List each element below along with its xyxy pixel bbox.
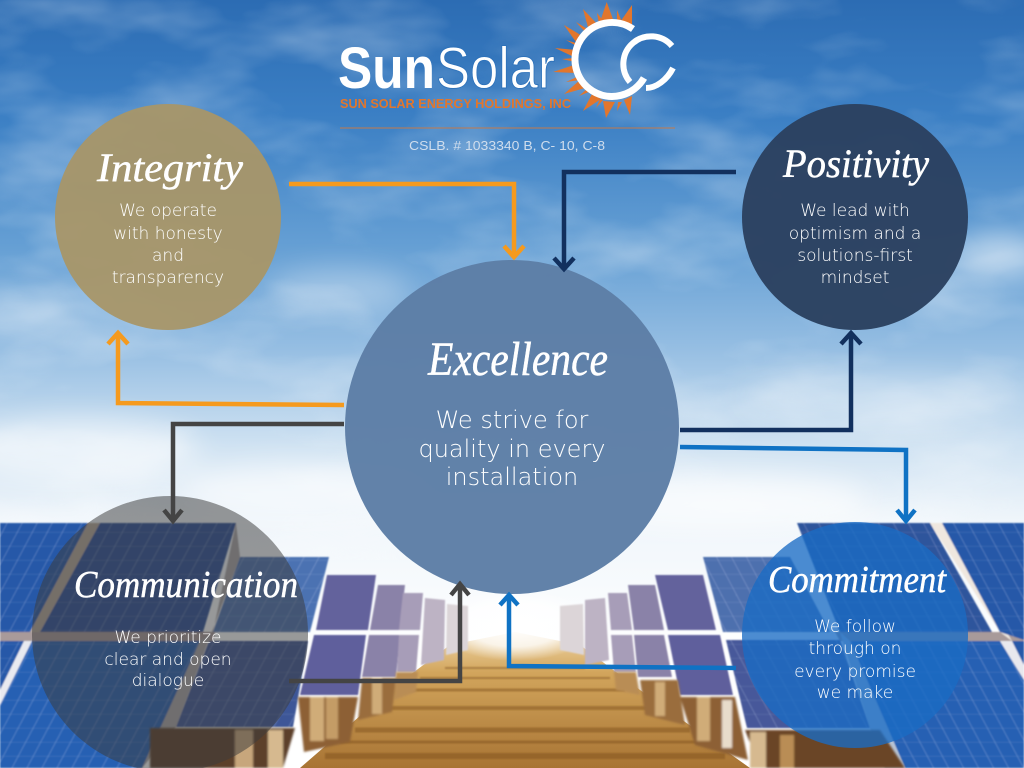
- text: Commitment description: through on: [809, 639, 901, 659]
- circle: Positivity: [742, 104, 968, 330]
- icon: linked rings: [575, 22, 673, 96]
- wordmark: SunSolar: Solar: [436, 36, 555, 101]
- background: supports left: [150, 672, 418, 768]
- text: Integrity description: and: [152, 246, 184, 266]
- text: Commitment description: We follow: [814, 617, 896, 637]
- circle: Integrity: [55, 104, 281, 330]
- background: solar panels left: [0, 523, 468, 768]
- text: Commitment description: we make: [817, 683, 893, 703]
- arrow: Communication to Excellence: [289, 584, 469, 681]
- text: Communication description: clear and open: [104, 650, 232, 670]
- background: solar panels right: [560, 523, 1024, 768]
- text: Integrity description: We operate: [119, 201, 217, 221]
- logo: SunSolar: [338, 2, 675, 153]
- heading: Positivity: Positivity: [782, 141, 929, 186]
- arrow: Excellence to Positivity: [680, 333, 861, 430]
- circle: Excellence: [345, 260, 679, 594]
- heading: Communication: Communication: [74, 564, 298, 606]
- text: Positivity description: solutions-first: [797, 246, 913, 266]
- arrow: Commitment to Excellence: [500, 595, 736, 668]
- text: Positivity description: mindset: [821, 268, 889, 288]
- arrow: Excellence to Commitment: [680, 447, 915, 521]
- arrow: Positivity to Excellence: [554, 172, 736, 269]
- text: Integrity description: transparency: [112, 268, 224, 288]
- text: company name: SUN SOLAR ENERGY HOLDINGS, INC: [340, 97, 571, 111]
- arrow: Excellence to Communication: [164, 424, 344, 521]
- text: Commitment description: every promise: [794, 662, 916, 682]
- wordmark: SunSolar: [338, 36, 555, 101]
- circle: Commitment: [742, 522, 968, 748]
- icon: sun rays: [553, 2, 632, 118]
- background: field: [300, 589, 750, 768]
- heading: Commitment: Commitment: [768, 559, 947, 601]
- background: supports right: [614, 672, 905, 768]
- text: Positivity description: We lead with: [800, 201, 910, 221]
- text: Excellence description: installation: [446, 463, 578, 491]
- heading: Excellence: Excellence: [427, 333, 608, 386]
- text: Excellence description: We strive for: [436, 406, 589, 434]
- text: Communication description: We prioritize: [114, 628, 222, 648]
- text: Positivity description: optimism and a: [789, 224, 921, 244]
- text: Communication description: dialogue: [132, 671, 204, 691]
- text: license number: CSLB. # 1033340 B, C- 10, C-8: [409, 139, 605, 153]
- wordmark: SunSolar: Sun: [338, 36, 435, 101]
- text: Integrity description: with honesty: [113, 224, 223, 244]
- arrow: Integrity to Excellence: [289, 184, 524, 257]
- text: Excellence description: quality in every: [418, 435, 606, 463]
- heading: Integrity: Integrity: [96, 145, 243, 190]
- circle: Communication: [32, 496, 308, 768]
- arrow: Excellence to Integrity: [108, 333, 344, 405]
